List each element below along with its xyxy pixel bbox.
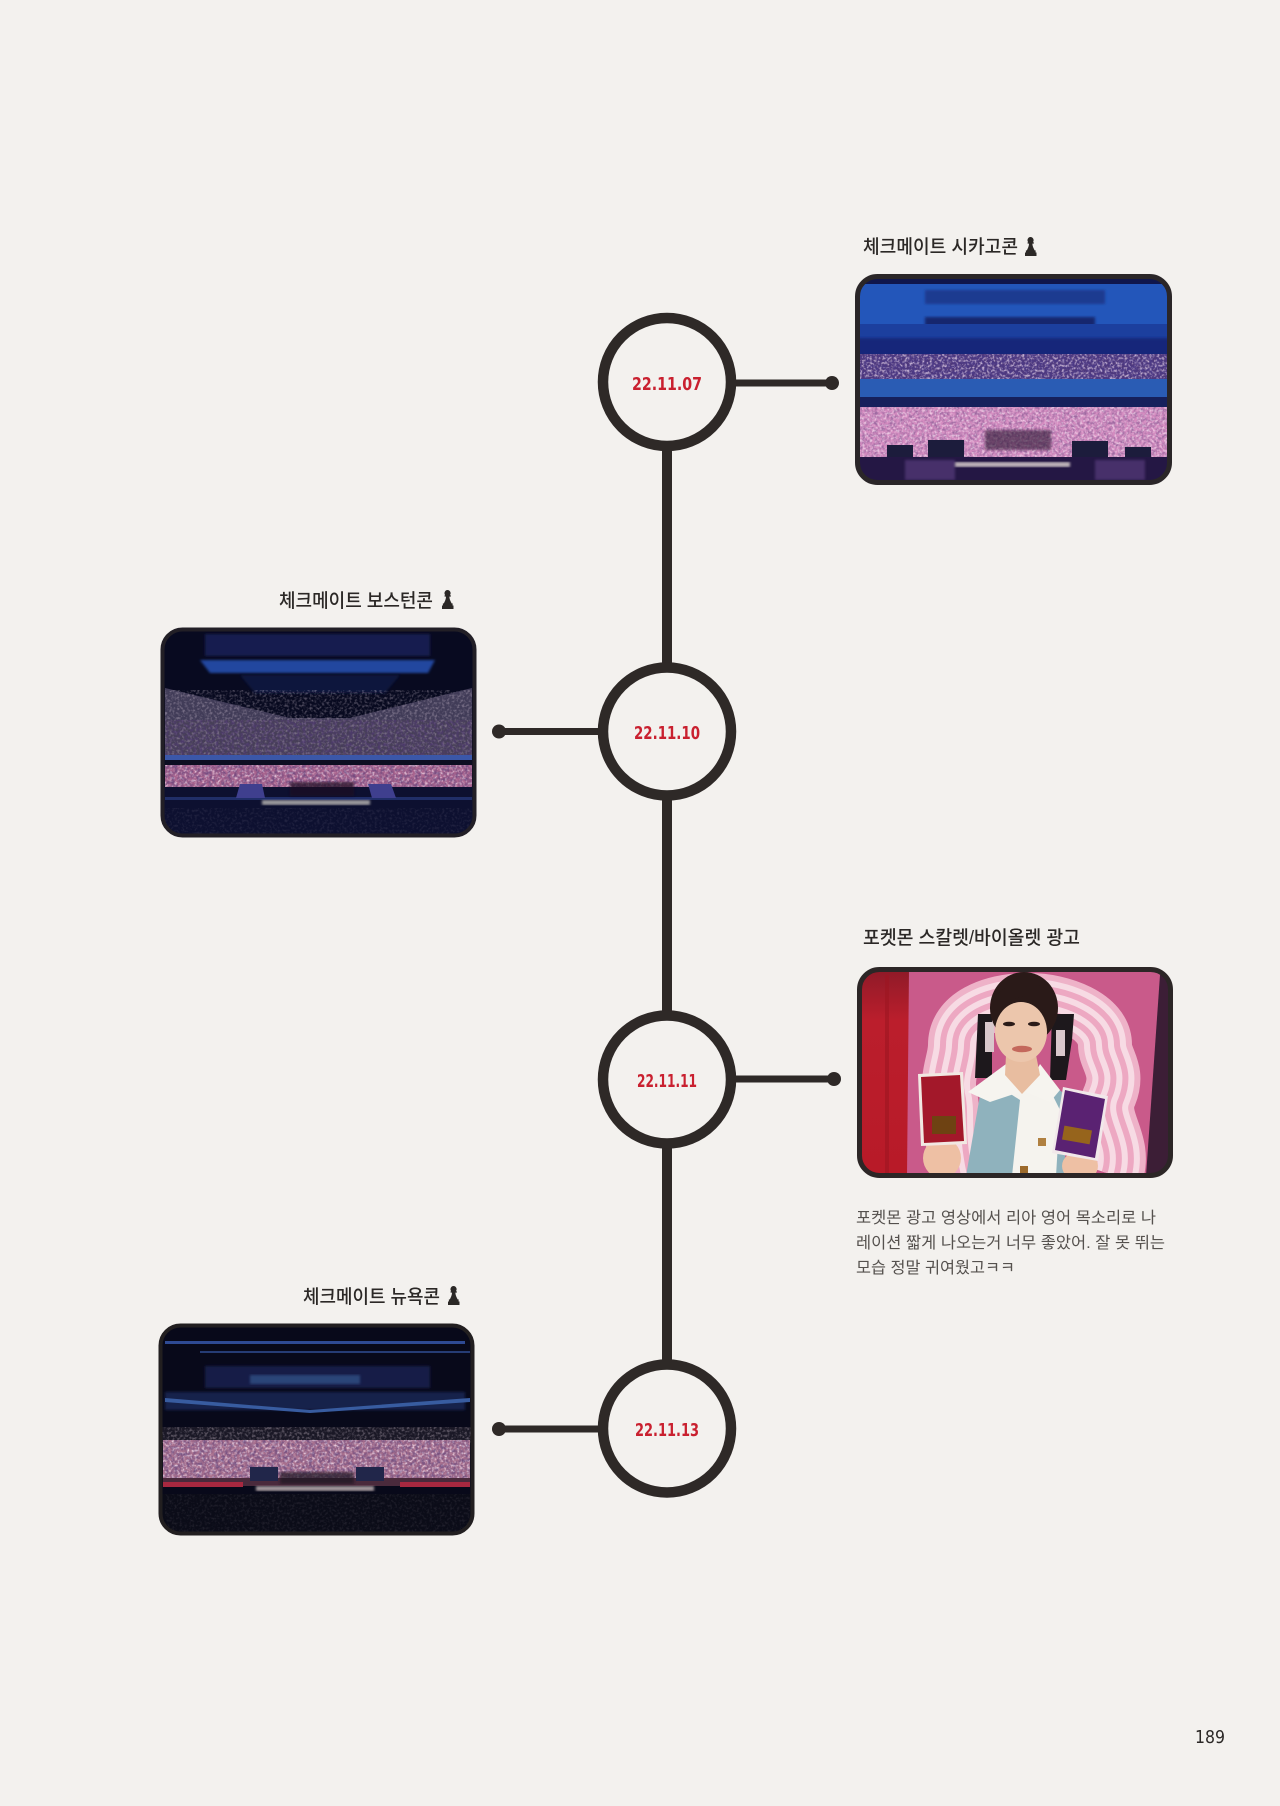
photo: Pokemon Scarlet/Violet ad <box>859 969 1171 1181</box>
caption: Pokemon ad comment: 모습 정말 귀여웠고ㅋㅋ <box>856 1259 1015 1277</box>
date node 22.11.11 <box>603 1016 731 1144</box>
heading: Boston concert: 체크메이트 보스턴콘 <box>279 590 433 612</box>
date node 22.11.07 <box>603 318 731 446</box>
date node 22.11.10 <box>603 668 731 796</box>
photo: Boston concert stage <box>162 629 475 836</box>
photo frame: Pokemon ad <box>860 970 1170 1176</box>
timeline spine <box>492 376 841 1436</box>
caption: Pokemon ad comment: 포켓몬 광고 영상에서 리아 영어 목소리로 나 <box>856 1209 1156 1227</box>
page number: 189 <box>1195 1727 1225 1748</box>
heading: New York concert: 체크메이트 뉴욕콘 <box>303 1286 440 1308</box>
heading: Pokemon ad: 포켓몬 스칼렛/바이올렛 광고 <box>863 927 1080 949</box>
heading: Chicago concert: 체크메이트 시카고콘 <box>863 236 1018 258</box>
photo frame: New York <box>160 1326 472 1534</box>
photo frame: Chicago <box>858 276 1170 482</box>
date node 22.11.07: 22.11.07 <box>632 374 702 395</box>
date node 22.11.10: 22.11.10 <box>634 723 700 744</box>
date node 22.11.13 <box>603 1364 731 1492</box>
caption: Pokemon ad comment: 레이션 짧게 나오는거 너무 좋았어. 잘 못 뛰는 <box>856 1234 1165 1252</box>
date node 22.11.13: 22.11.13 <box>635 1420 699 1441</box>
photo frame: Boston <box>162 630 474 836</box>
photo: Chicago concert stage <box>857 276 1170 483</box>
photo: New York concert stage <box>160 1325 473 1534</box>
caption: Pokemon ad comment <box>856 1209 1165 1277</box>
date node 22.11.11: 22.11.11 <box>637 1071 697 1092</box>
